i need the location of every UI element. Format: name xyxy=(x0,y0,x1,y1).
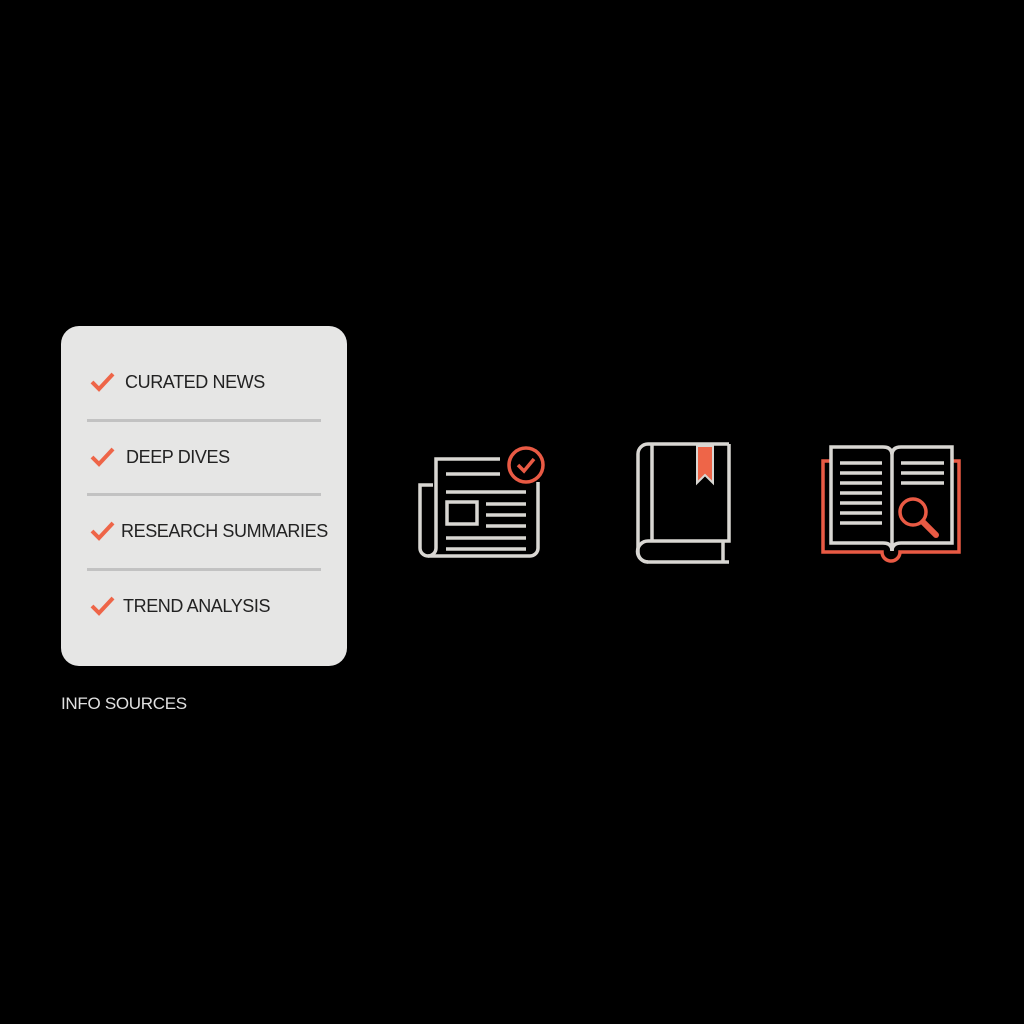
item: curated news: CURATED NEWS xyxy=(125,372,265,392)
item: deep dives: DEEP DIVES xyxy=(126,447,230,467)
item: research summaries: RESEARCH SUMMARIES xyxy=(121,521,328,541)
icon: newspaper with check xyxy=(420,448,543,556)
item: trend analysis: TREND ANALYSIS xyxy=(123,596,270,616)
panel: info sources card xyxy=(61,326,347,666)
icon: open book with magnifier xyxy=(823,447,959,561)
caption: info sources: INFO SOURCES xyxy=(61,694,187,713)
icon: book with bookmark xyxy=(638,444,729,562)
